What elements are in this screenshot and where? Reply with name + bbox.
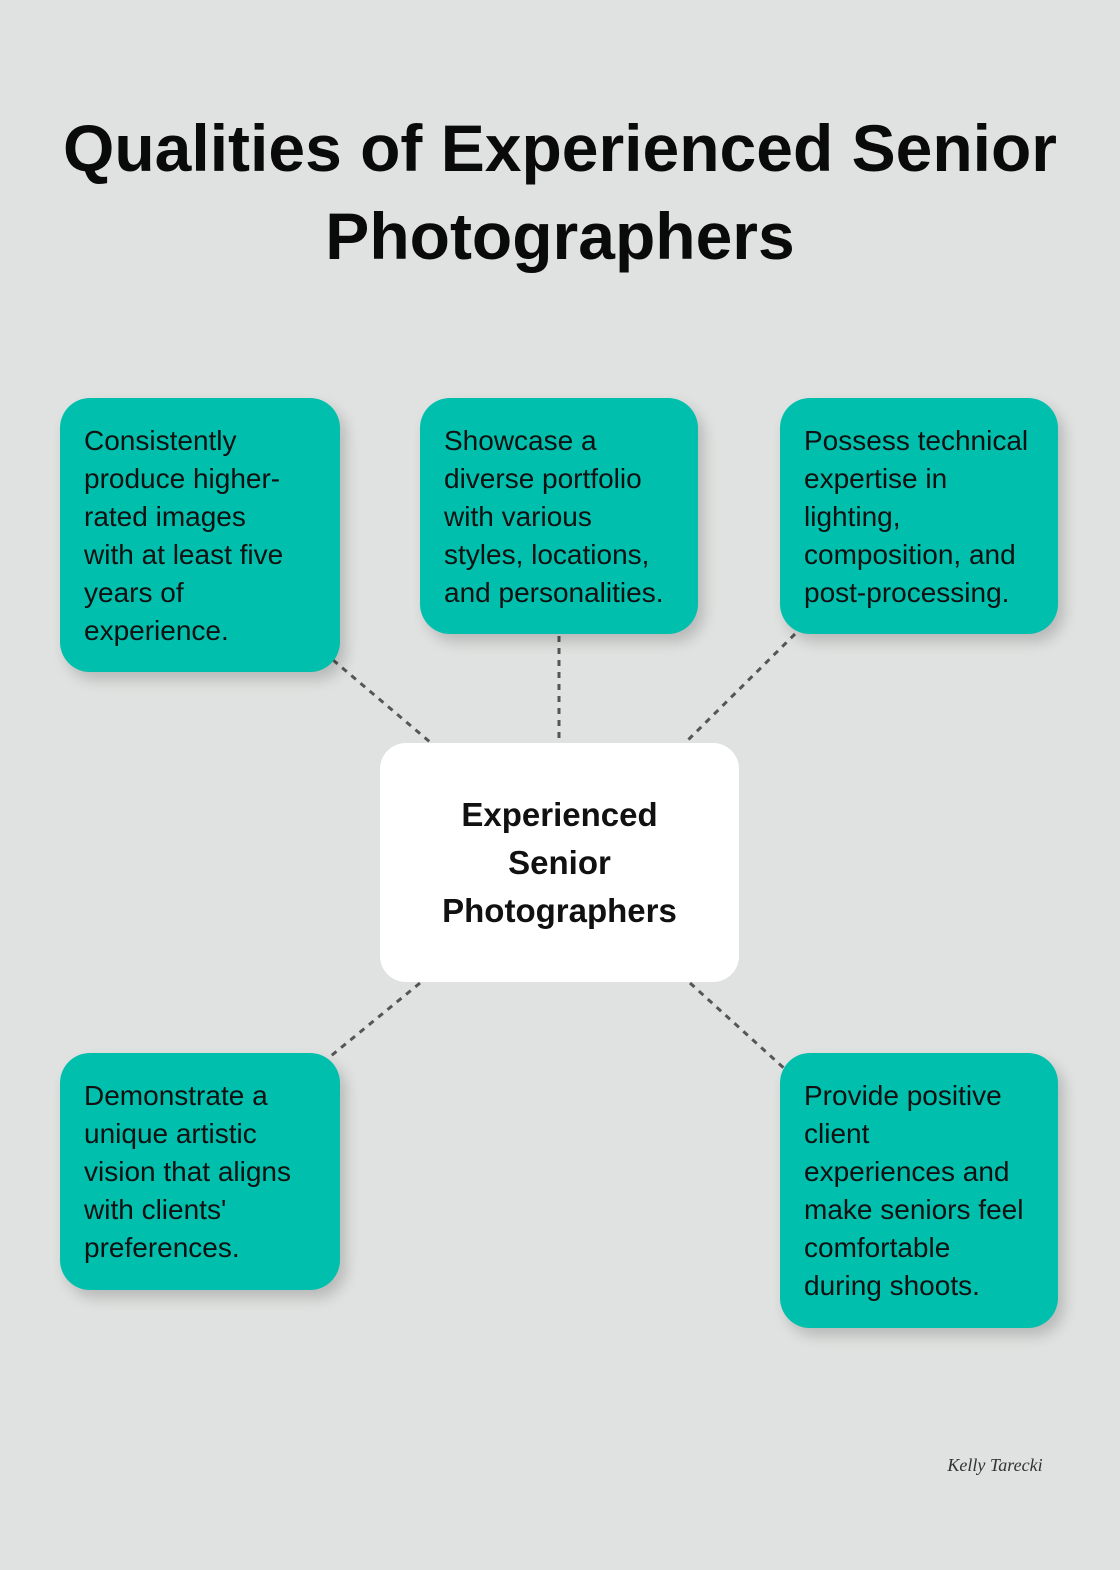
box: experience: Consistently [84,425,237,456]
box: portfolio: styles, locations, [444,539,649,570]
box: experience [60,398,340,672]
box: technical: lighting, [804,501,901,532]
box: artistic vision: preferences. [84,1232,240,1263]
box: portfolio: with various [444,501,592,532]
box: client experience: Provide positive [804,1080,1002,1111]
box: client experience [780,1053,1058,1328]
box: client experience: experiences and [804,1156,1009,1187]
box: technical: Possess technical [804,425,1028,456]
box: experience: rated images [84,501,246,532]
title [63,111,1057,273]
box: experience: years of [84,577,184,608]
box: artistic vision [60,1053,340,1290]
box: experience: produce higher- [84,463,280,494]
box: experience: with at least five [84,539,283,570]
box: artistic vision: unique artistic [84,1118,257,1149]
box: portfolio [420,398,698,634]
logo: Kelly Tarecki [947,1455,1043,1475]
box: technical: composition, and [804,539,1016,570]
box: client experience: during shoots. [804,1270,980,1301]
center node: Experienced [461,796,658,832]
box: technical: expertise in [804,463,947,494]
box: client experience: comfortable [804,1232,950,1263]
box: portfolio: and personalities. [444,577,663,608]
box: portfolio: Showcase a [444,425,597,456]
box: technical: post-processing. [804,577,1009,608]
box: client experience: make seniors feel [804,1194,1023,1225]
center node: Senior [508,844,611,880]
box: portfolio: diverse portfolio [444,463,642,494]
box: artistic vision: Demonstrate a [84,1080,268,1111]
box: artistic vision: with clients' [84,1194,226,1225]
title: Qualities of Experienced Senior [63,111,1057,185]
title: Photographers [325,199,795,273]
center node: Photographers [442,892,677,928]
box: experience: experience. [84,615,229,646]
center node [380,743,739,982]
box: artistic vision: vision that aligns [84,1156,291,1187]
box: client experience: client [804,1118,869,1149]
box: technical [780,398,1058,634]
